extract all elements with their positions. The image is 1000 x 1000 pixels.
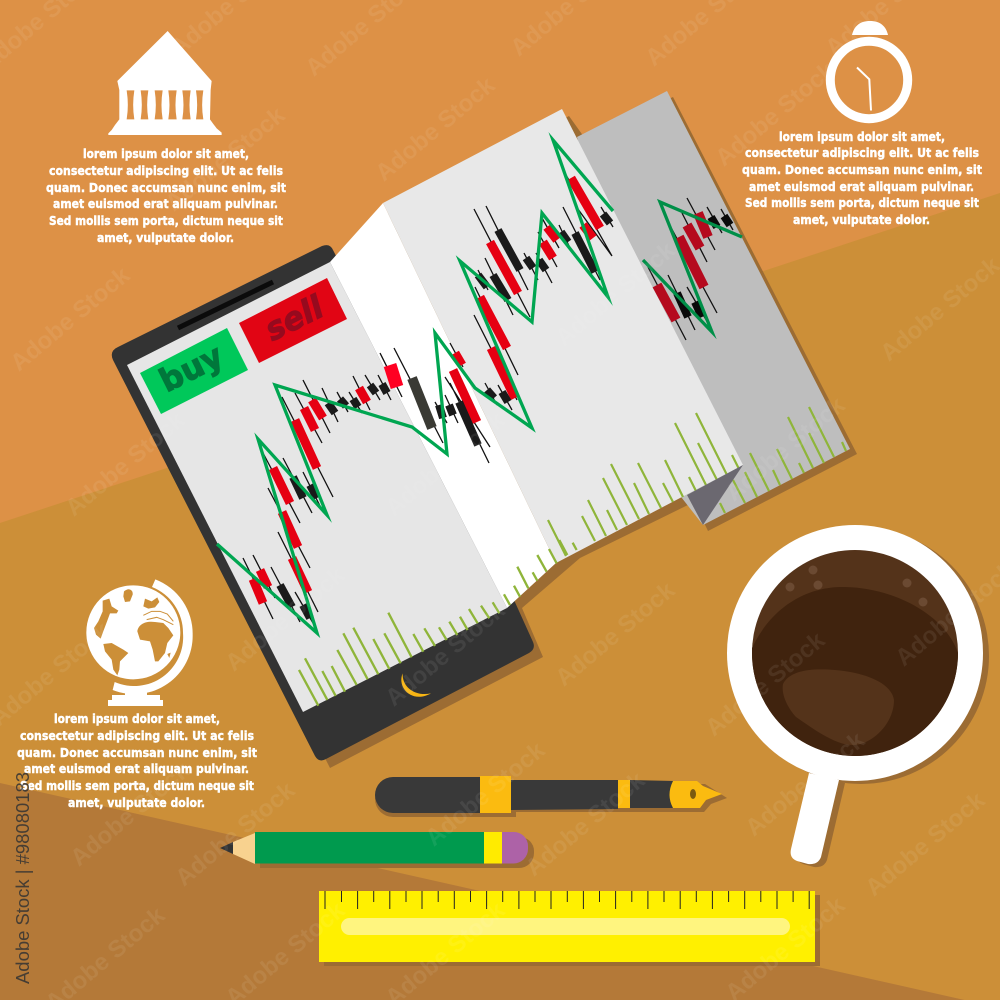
button: sell: sell: [259, 287, 330, 349]
text block: bank: consectetur adipiscing elit. Ut ac felis: [49, 164, 283, 178]
panel: light middle fold: [383, 109, 743, 563]
text block: globe: [17, 712, 257, 810]
background: lower brown band: [0, 783, 1000, 1000]
text block: globe: lorem ipsum dolor sit amet,: [54, 712, 220, 726]
panel: shaded back fold: [577, 91, 850, 525]
watermarks: Adobe Stock: [550, 236, 681, 352]
icon: bank building: [108, 31, 222, 135]
watermarks: Adobe Stock: [520, 766, 651, 882]
text block: clock: amet, vulputate dolor.: [793, 213, 930, 227]
watermarks: Adobe Stock: [5, 261, 136, 377]
icon: ruler: [319, 891, 820, 966]
button: buy: [140, 328, 248, 414]
text block: clock: [742, 130, 982, 227]
watermarks: Adobe Stock: [65, 756, 196, 872]
phone speaker: [178, 282, 273, 328]
icon: phone home button crescent: [401, 673, 431, 697]
icon: coffee cup: [727, 525, 989, 867]
button: buy: buy: [153, 336, 229, 400]
candlestick chart: main: [243, 168, 613, 623]
text block: clock: consectetur adipiscing elit. Ut ac felis: [745, 146, 979, 160]
icon: pencil: [220, 832, 534, 868]
text block: clock: lorem ipsum dolor sit amet,: [779, 130, 945, 144]
text block: bank: quam. Donec accumsan nunc enim, sit: [46, 181, 286, 195]
watermarks: Adobe Stock: [60, 406, 191, 522]
stock id vertical caption: Adobe Stock | #98080183: [13, 772, 33, 984]
paper corner fold: [687, 465, 743, 525]
price zigzag line: [217, 140, 613, 633]
text block: bank: [46, 147, 286, 245]
text block: clock: amet euismod erat aliquam pulvinar.: [749, 180, 974, 194]
watermarks: Adobe Stock: [710, 56, 841, 172]
price zigzag line on shaded fold: [643, 202, 742, 332]
watermarks: Adobe Stock: [170, 776, 301, 892]
panel: white fold: [330, 203, 556, 608]
watermarks: Adobe Stock: [860, 786, 991, 902]
phone body: [112, 245, 534, 760]
text block: globe: consectetur adipiscing elit. Ut ac felis: [20, 729, 254, 743]
watermarks: Adobe Stock: [220, 561, 351, 677]
watermarks: Adobe Stock: [420, 736, 551, 852]
text block: bank: amet euismod erat aliquam pulvinar.: [53, 197, 278, 211]
drop shadow of phone and paper: [125, 97, 857, 768]
text block: bank: amet, vulputate dolor.: [97, 231, 234, 245]
volume bars on screen and folds: [299, 407, 846, 706]
text block: globe: amet, vulputate dolor.: [68, 796, 205, 810]
icon: alarm clock: [830, 21, 908, 119]
text block: globe: Sed mollis sem porta, dictum neque sit: [20, 779, 254, 793]
watermarks: Adobe Stock: [720, 391, 851, 507]
text block: globe: quam. Donec accumsan nunc enim, sit: [17, 746, 257, 760]
watermarks: Adobe Stock: [550, 576, 681, 692]
panel: phone screen: [127, 262, 507, 712]
text block: bank: lorem ipsum dolor sit amet,: [83, 147, 249, 161]
button: sell: [239, 278, 347, 363]
watermarks: Adobe Stock: [740, 726, 871, 842]
watermarks: Adobe Stock: [160, 101, 291, 217]
watermarks: Adobe Stock: [700, 626, 831, 742]
text block: clock: quam. Donec accumsan nunc enim, sit: [742, 163, 982, 177]
icon: fountain pen: [375, 776, 727, 817]
watermarks: Adobe Stock: [370, 71, 501, 187]
watermarks: Adobe Stock: [380, 596, 511, 712]
text block: globe: amet euismod erat aliquam pulvinar.: [24, 762, 249, 776]
watermarks: Adobe Stock: [380, 406, 511, 522]
candlestick chart: shaded fold: [648, 198, 733, 340]
icon: desk globe: [86, 579, 193, 706]
text block: bank: Sed mollis sem porta, dictum neque sit: [49, 214, 283, 228]
